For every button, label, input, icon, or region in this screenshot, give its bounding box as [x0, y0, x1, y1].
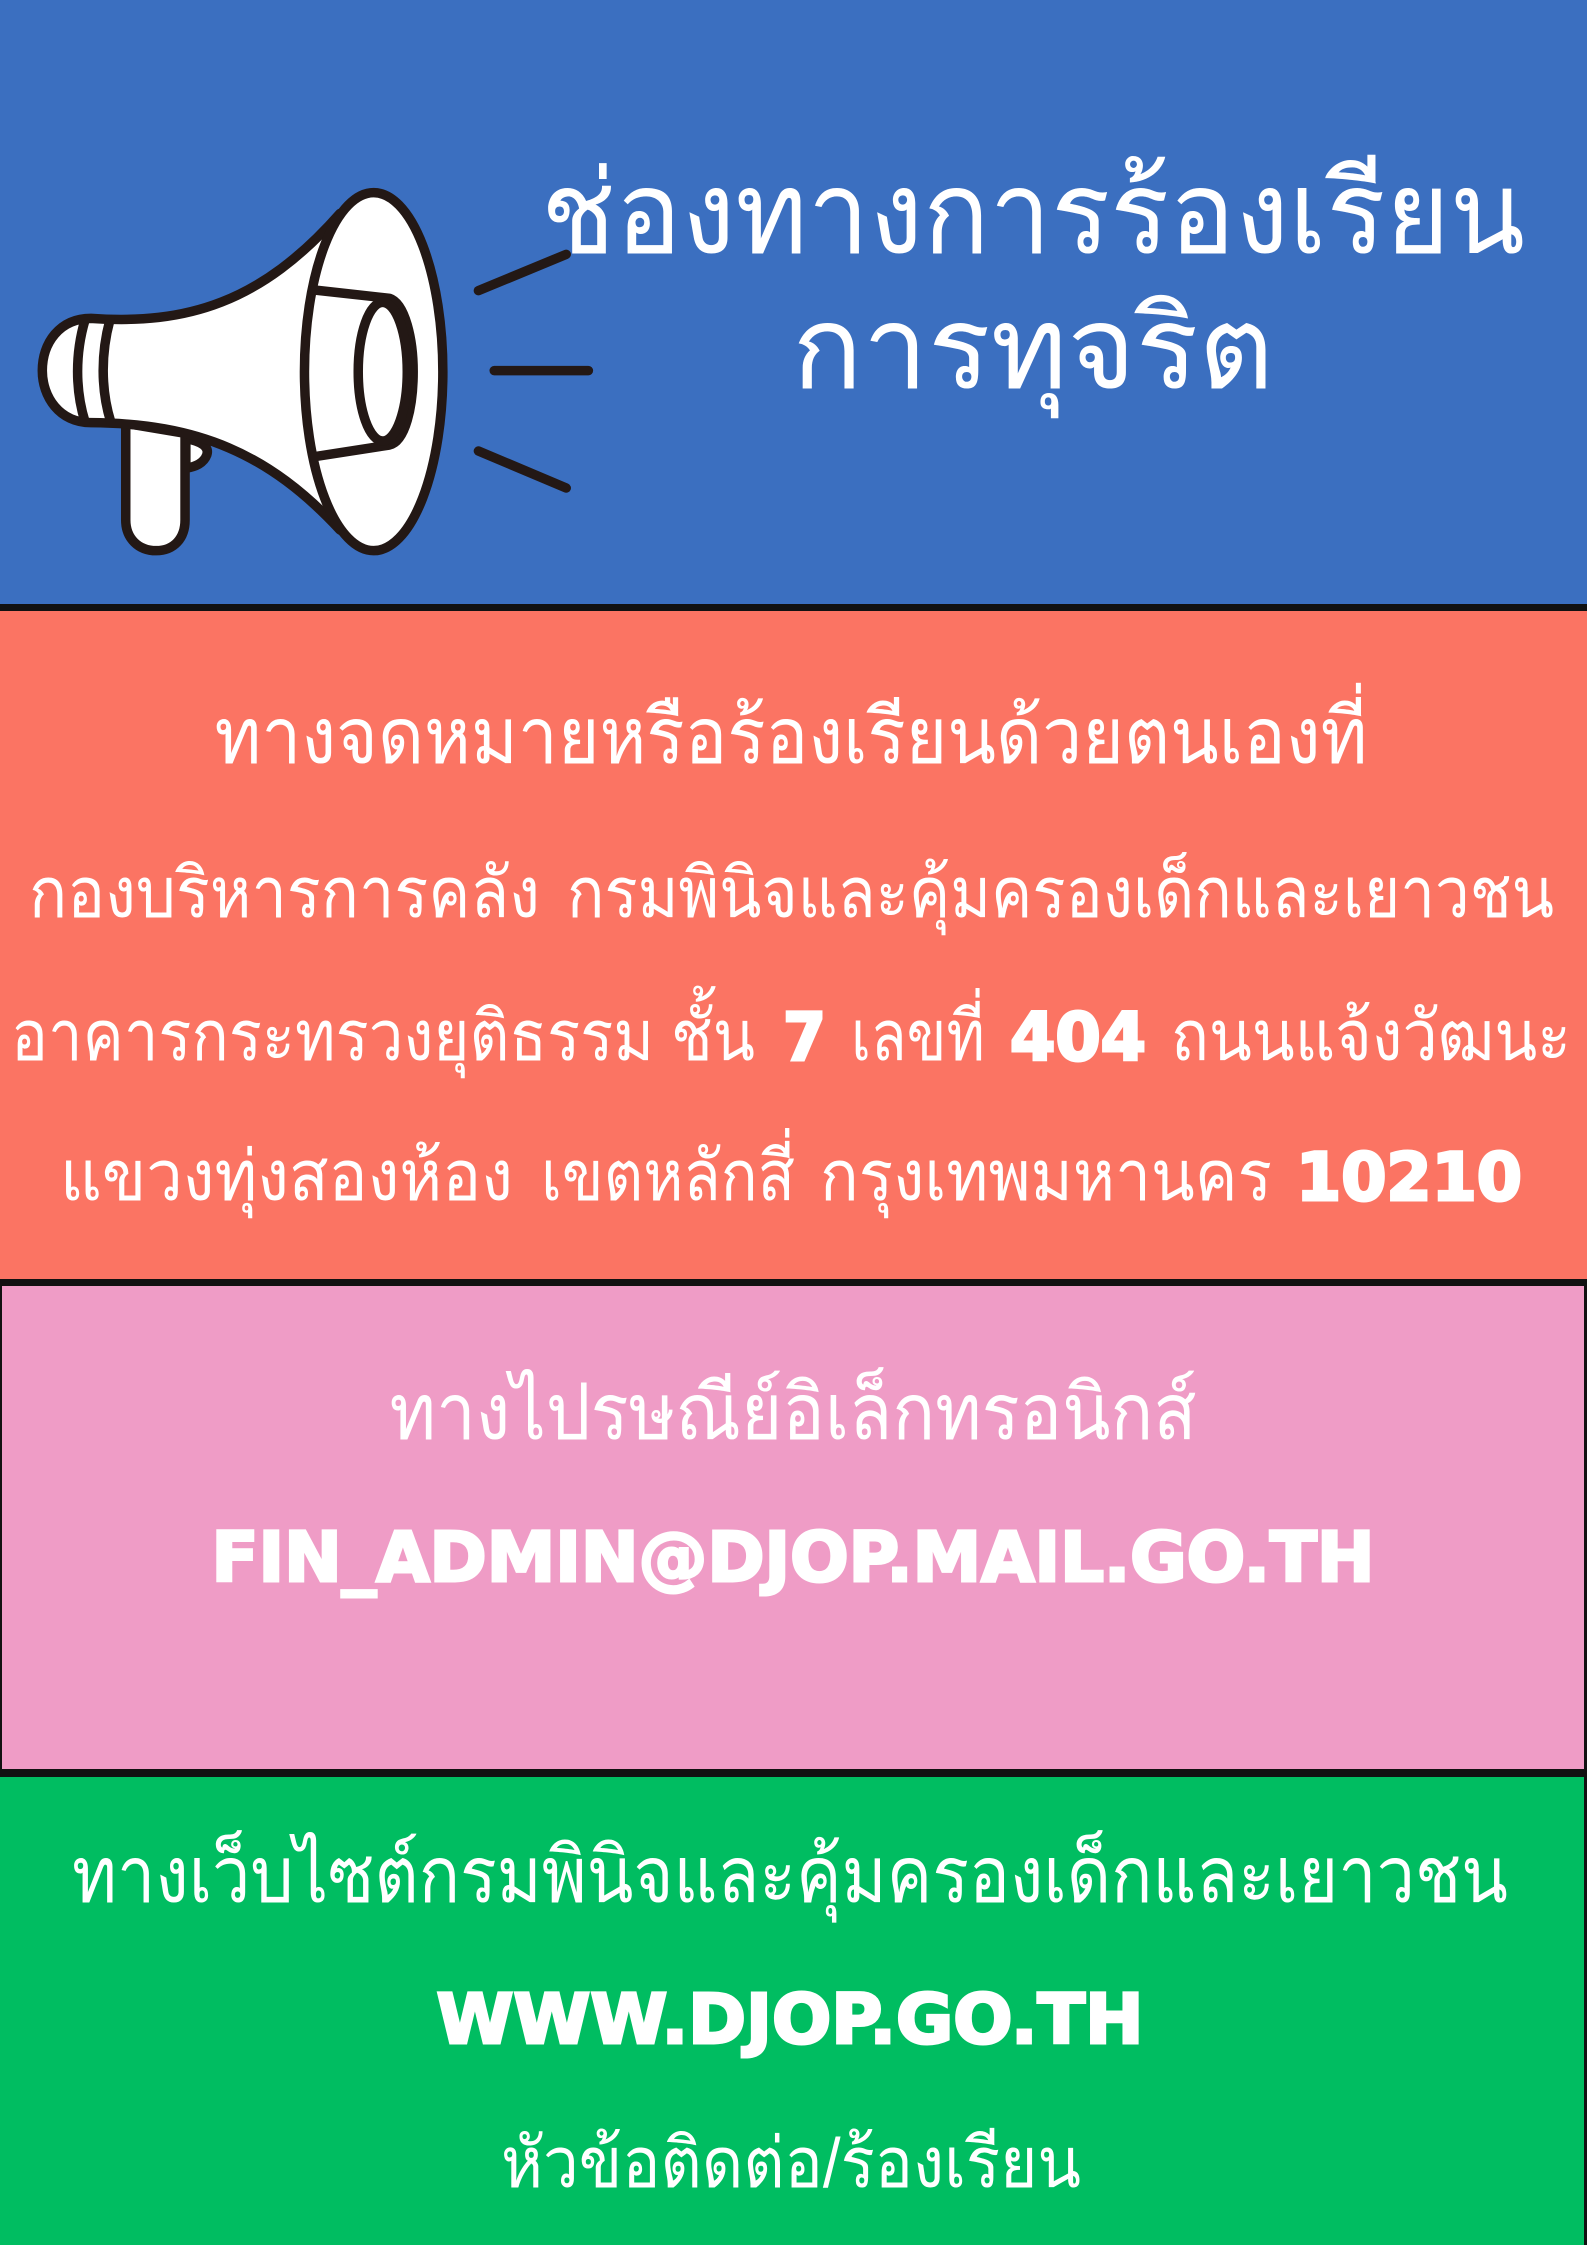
address line 2 [11, 985, 1571, 1079]
panel: post and walk-in [0, 611, 1587, 1280]
contact topic: หัวข้อติดต่อ/ร้องเรียน [501, 2124, 1081, 2202]
address line 2: 404 [1010, 999, 1146, 1076]
address line 3 [60, 1128, 1522, 1219]
heading: email: ทางไปรษณีย์อิเล็กทรอนิกส์ [390, 1367, 1196, 1456]
address line 2: 7 [783, 999, 826, 1076]
border: website panel right [1584, 1777, 1587, 2245]
divider: post and email [0, 1279, 1587, 1286]
address line 1: กองบริหารการคลัง [29, 854, 540, 932]
border: email panel left [0, 1279, 2, 1777]
address line 3: 10210 [1296, 1139, 1522, 1216]
title: การทุจริต [792, 283, 1274, 419]
title: ช่องทางการร้องเรียน [541, 148, 1525, 278]
address line 3: กรุงเทพมหานคร [820, 1137, 1272, 1219]
divider: email and website [0, 1769, 1587, 1777]
address line 2: เลขที่ [851, 988, 985, 1075]
panel: header [0, 0, 1587, 604]
email address: FIN_ADMIN@DJOP.MAIL.GO.TH [212, 1518, 1374, 1598]
website address: WWW.DJOP.GO.TH [436, 1980, 1144, 2060]
address line 3: แขวงทุ่งสองห้อง [60, 1137, 513, 1219]
address line 2: อาคารกระทรวงยุติธรรม ชั้น [11, 985, 755, 1079]
border: email panel right [1584, 1279, 1587, 1777]
address line 3: เขตหลักสี่ [541, 1128, 795, 1215]
address line 1 [29, 852, 1554, 936]
heading: post or in person: ทางจดหมายหรือร้องเรียนด้วยตนเองที่ [214, 683, 1368, 780]
icon: megaphone [42, 193, 588, 551]
divider: header and post [0, 604, 1587, 611]
panel: website [0, 1777, 1584, 2245]
title [541, 148, 1525, 419]
panel: email [2, 1286, 1584, 1769]
